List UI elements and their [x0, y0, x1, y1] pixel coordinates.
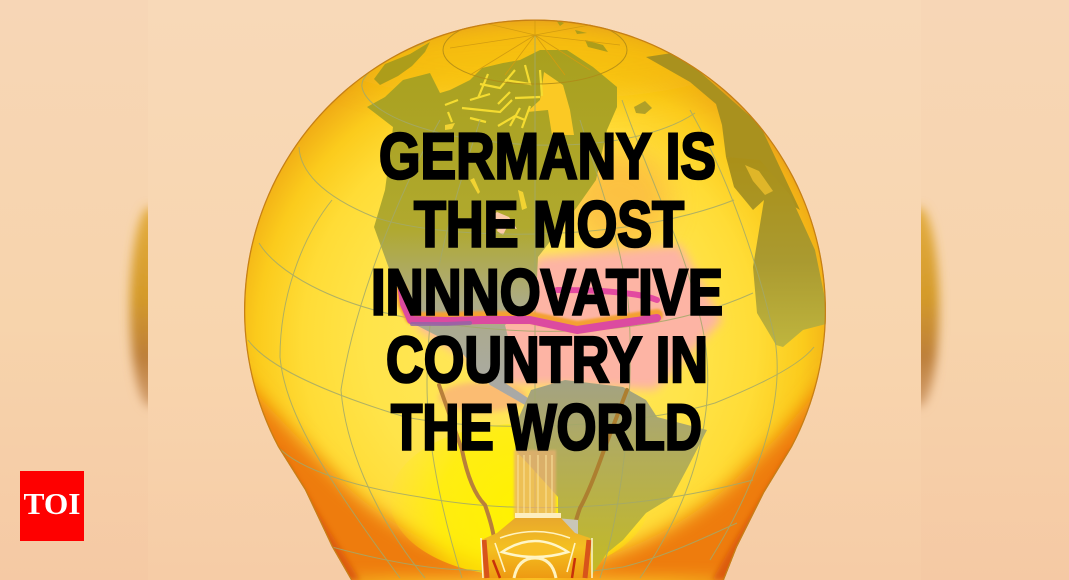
- headline line 1: GERMANY IS: [379, 120, 716, 192]
- left blurred bulb reflection: [122, 202, 148, 410]
- bulb base: [481, 518, 592, 578]
- glass stem: [514, 450, 578, 542]
- headline line 5: THE WORLD: [391, 390, 702, 464]
- continent: North America: [367, 50, 617, 405]
- continent: Europe strip: [646, 53, 800, 210]
- globe grid lines: [248, 16, 814, 578]
- continent: Africa: [726, 157, 830, 347]
- headline: [371, 120, 723, 464]
- bulb outline: [244, 20, 826, 580]
- filament supports: [439, 385, 627, 538]
- continent: Russia east: [374, 42, 430, 85]
- light bulb globe: [235, 16, 835, 580]
- bulb glass body: [244, 20, 826, 580]
- Iceland: [634, 101, 652, 114]
- central background panel: [148, 0, 921, 580]
- Arctic islands and Baffin Bay: [445, 65, 574, 210]
- TOI logo: TOI: [24, 486, 80, 521]
- Great Lakes: [496, 212, 517, 235]
- right blurred bulb reflection: [921, 202, 947, 410]
- headline line 3: INNNOVATIVE: [371, 256, 723, 328]
- Greenland north specks: [556, 20, 608, 52]
- pink glow region: [400, 245, 722, 390]
- continent: South America: [515, 380, 707, 578]
- magenta glowing filament: [402, 290, 657, 330]
- interior glow and continents: [235, 16, 835, 580]
- headline line 2: THE MOST: [414, 188, 684, 260]
- arctic meridian rays: [450, 20, 620, 75]
- headline line 4: COUNTRY IN: [386, 323, 708, 396]
- TOI logo: [20, 471, 84, 541]
